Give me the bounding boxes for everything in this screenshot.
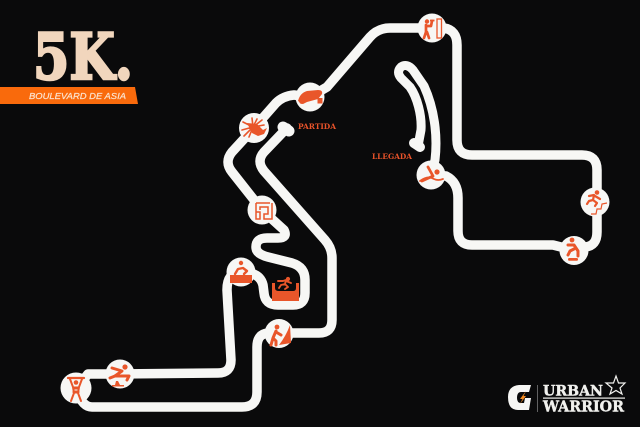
start label: PARTIDA [298,122,336,131]
icon: barrier climb [226,258,256,286]
icon: car [296,82,324,112]
icon: maze [248,196,276,224]
finish label: LLEGADA [372,152,412,161]
title: 5K.: 5K. [33,20,133,95]
divider [536,385,539,412]
icon: wall climb [264,319,294,348]
icon: hammer at wall [418,14,446,42]
logo: Gatorade G and Urban Warrior [508,376,625,416]
banner: route name [0,87,138,104]
route track [76,28,597,407]
icon: swimmer [416,160,446,190]
icon: explosion [239,113,269,143]
star [606,376,625,394]
icon: hurdle jumper [106,360,134,388]
icon: pit runner [272,277,299,301]
icon: stairs runner [580,188,610,216]
wordmark WARRIOR: WARRIOR [542,398,624,416]
logo G [508,385,531,410]
wordmark URBAN: URBAN [543,384,603,400]
banner: route name: BOULEVARD DE ASIA [29,91,126,101]
icon: tire runner [560,236,588,265]
icon: weightlifter [60,372,92,404]
